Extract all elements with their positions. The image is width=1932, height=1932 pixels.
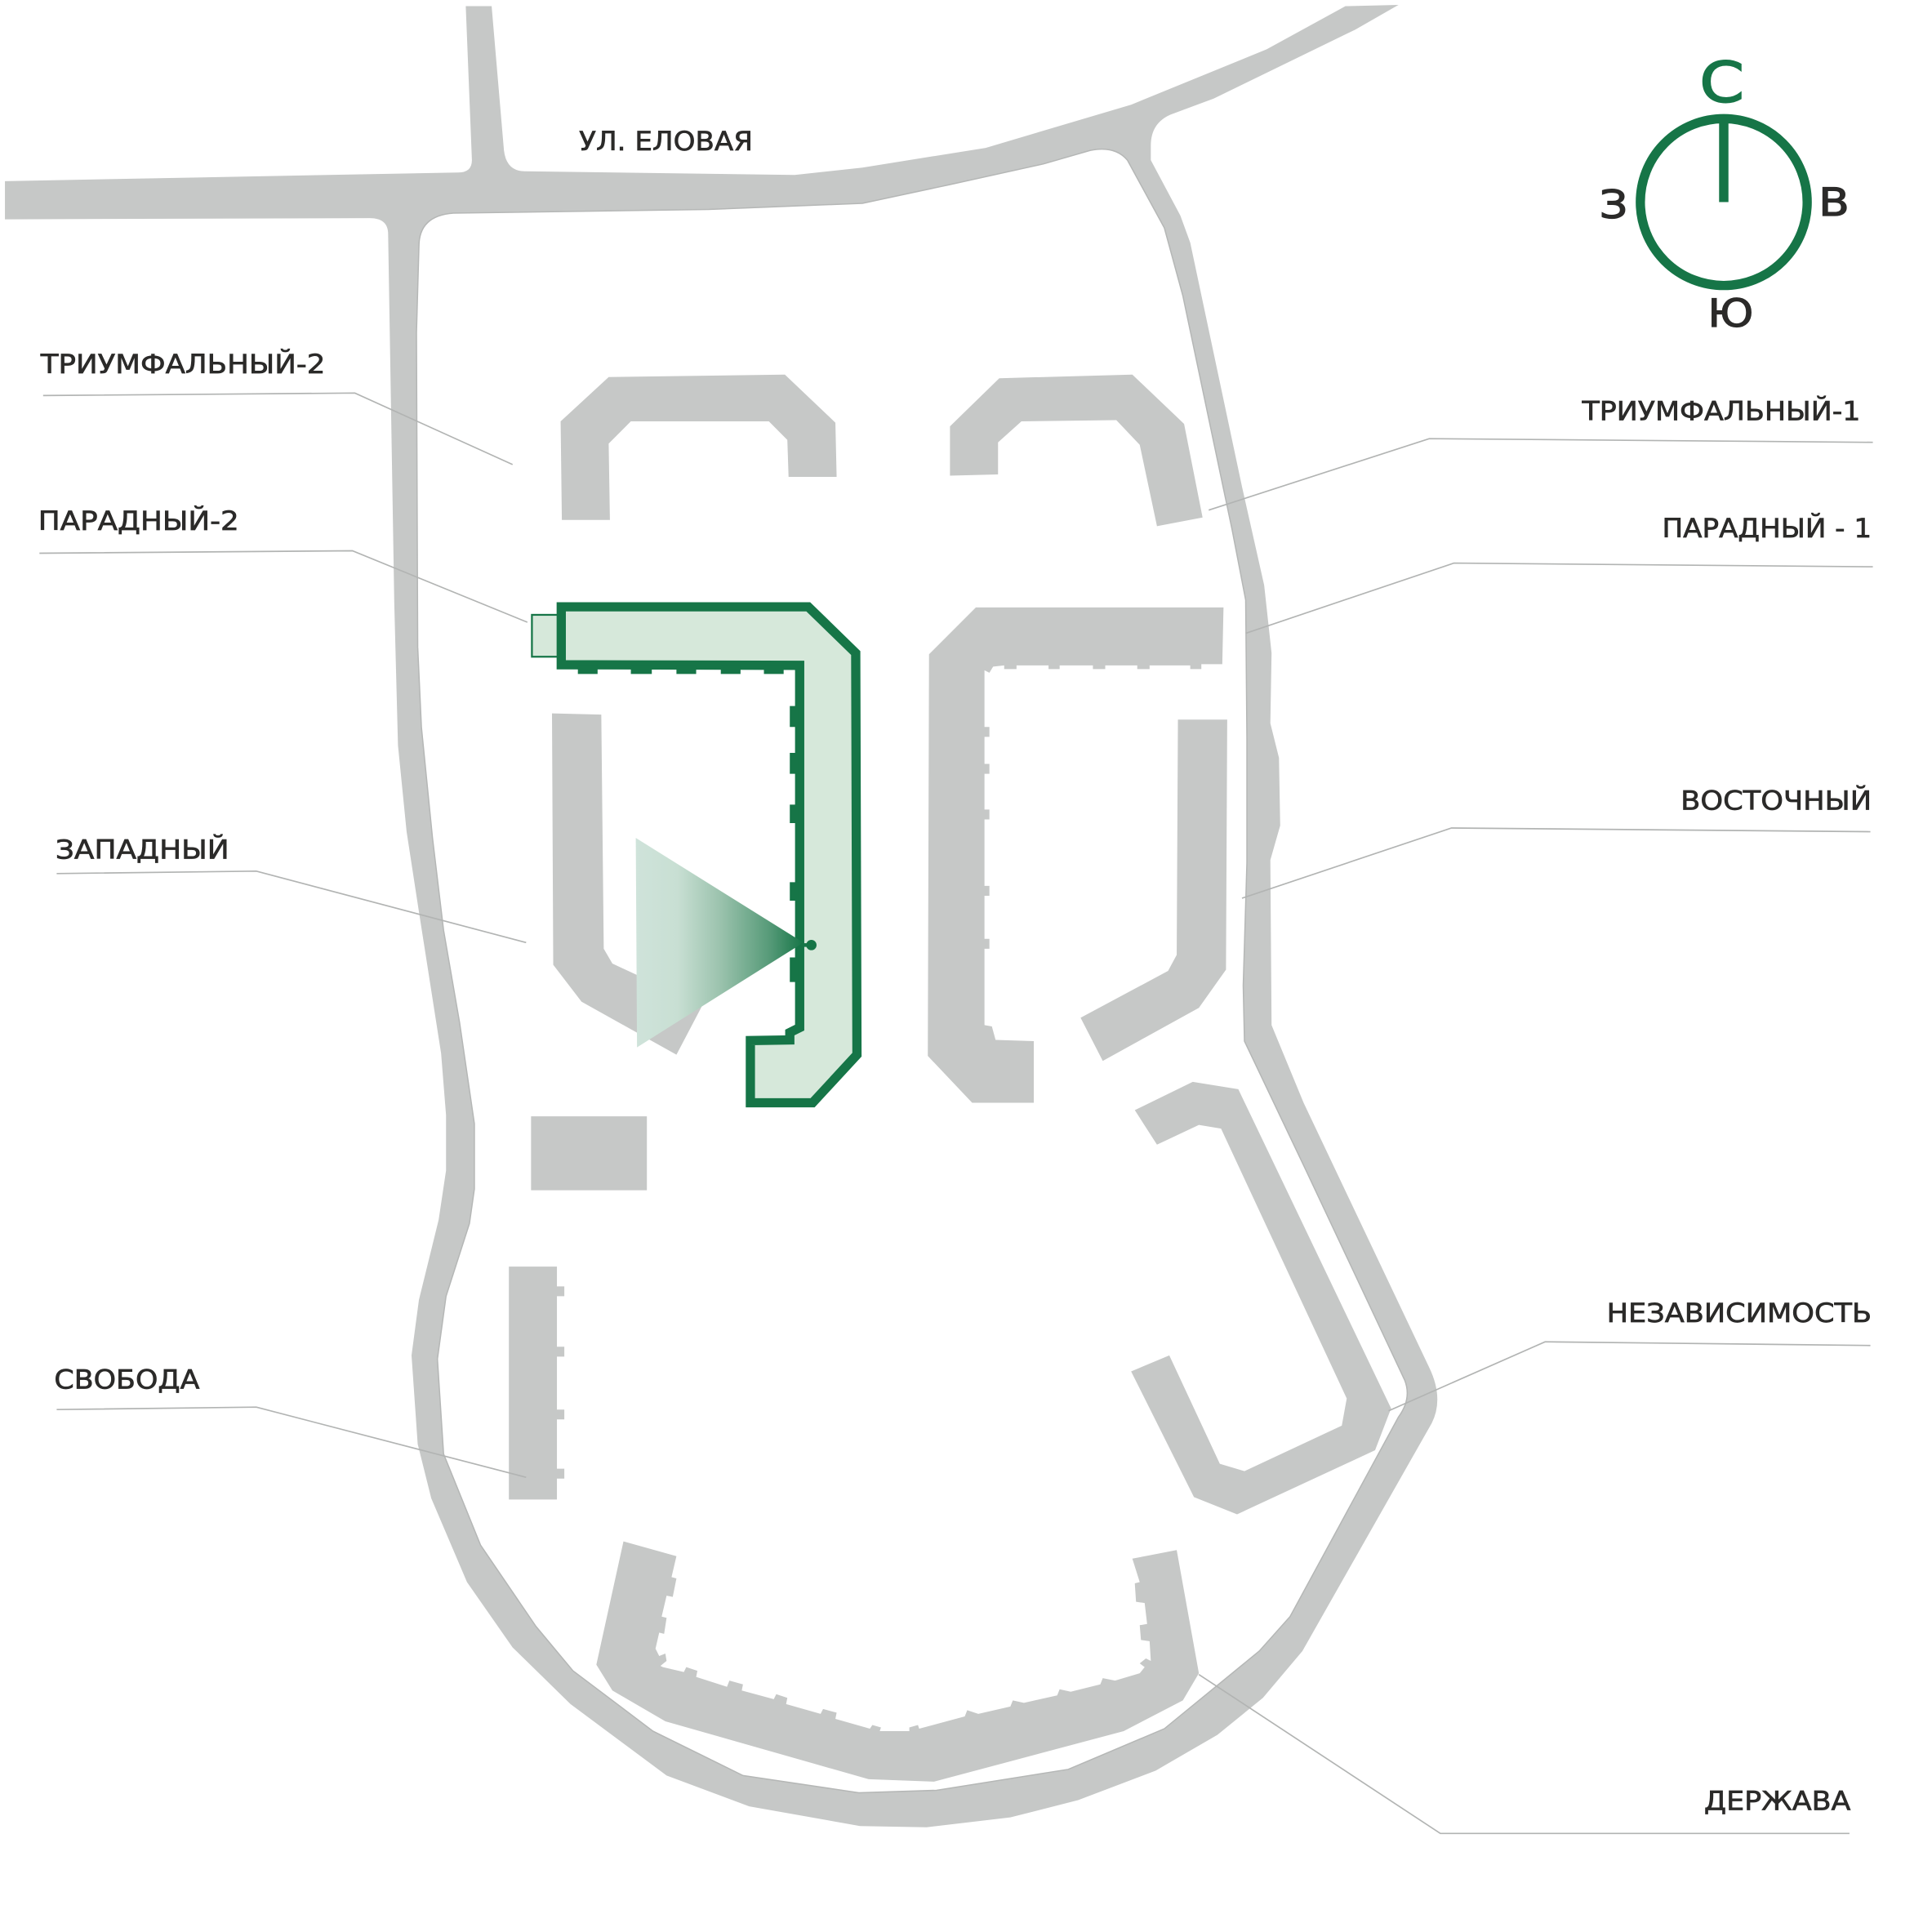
leader line: Триумфальный-2 [43,393,513,465]
label: Западный: ЗАПАДНЫЙ [56,835,229,866]
label: Парадный-2: ПАРАДНЫЙ-2 [38,505,239,536]
leader line: Восточный [1242,828,1871,898]
north letter: С [1700,51,1744,115]
label: Независимость: НЕЗАВИСИМОСТЬ [1607,1299,1872,1329]
highlighted building: Парадный-2 [561,607,857,1102]
leader line: Триумфальный-1 [1209,438,1873,510]
leader line: Свобода [56,1407,526,1477]
west letter: З [1600,184,1627,228]
annex of highlighted building [532,615,559,657]
east letter: В [1818,181,1850,225]
building: block [531,1116,647,1191]
building: Независимость [1131,1082,1391,1514]
compass ring [1640,118,1807,286]
roads [5,5,1437,1827]
leader line: Парадный-1 [1246,563,1873,634]
leader line: Западный [56,871,526,942]
south letter: Ю [1707,292,1753,336]
building: Свобода [509,1266,564,1499]
compass needle [1719,118,1729,202]
building: Западный [552,714,702,1055]
label: Восточный: ВОСТОЧНЫЙ [1680,785,1872,816]
building: Восточный [1080,719,1227,1061]
leader line: Держава [1199,1675,1850,1833]
building: Парадный-1 [928,608,1223,1102]
leader line: Парадный-2 [39,550,528,622]
street label: УЛ. ЕЛОВАЯ [579,127,753,157]
label: Триумфальный-2: ТРИУМФАЛЬНЫЙ-2 [40,349,325,380]
view cone [636,838,817,1048]
label: Парадный - 1: ПАРАДНЫЙ - 1 [1663,513,1872,544]
label: Держава: ДЕРЖАВА [1704,1787,1851,1817]
label: Свобода: СВОБОДА [54,1366,200,1396]
label: Триумфальный-1: ТРИУМФАЛЬНЫЙ-1 [1581,396,1860,427]
compass [1600,51,1850,336]
leader line: Независимость [1389,1342,1871,1411]
building: Триумфальный-1 [950,375,1203,526]
building: Триумфальный-2 [561,375,837,520]
building: Держава [596,1542,1199,1782]
